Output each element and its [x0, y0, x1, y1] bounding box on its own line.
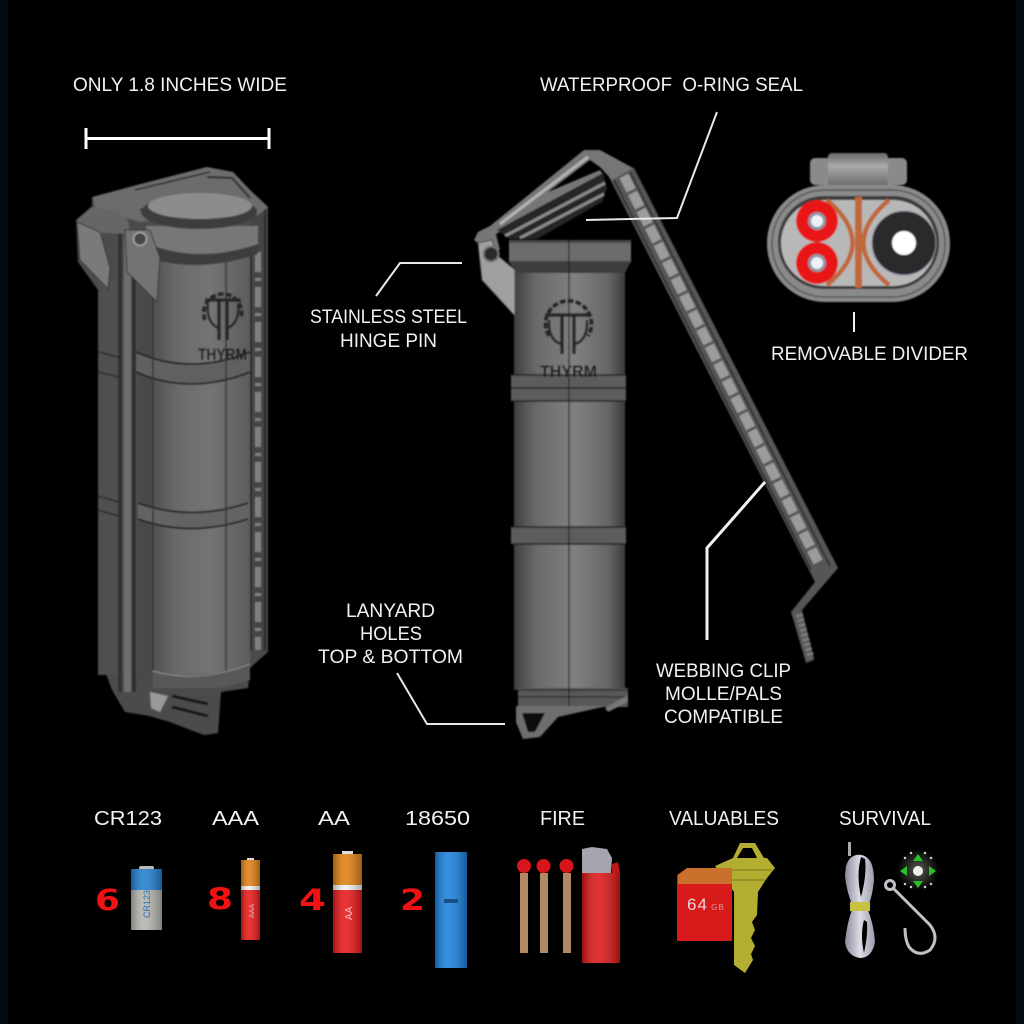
item: AA battery: AA [318, 807, 350, 830]
item: AA battery: 4 [299, 883, 326, 917]
label: stainless steel hinge pin: HINGE PIN [340, 331, 437, 352]
item: 18650 battery: 18650 [405, 807, 470, 830]
hinge plate and pin [478, 240, 515, 316]
item: valuables: VALUABLES [669, 807, 779, 830]
lighter [582, 847, 620, 963]
left closed case illustration [76, 167, 268, 735]
leader: O-ring seal [586, 112, 717, 220]
top collar [509, 240, 631, 273]
label: lanyard holes: TOP & BOTTOM [318, 647, 463, 668]
item: CR123 battery: CR123 [94, 807, 162, 830]
label: lanyard holes [318, 601, 505, 724]
item: fire: FIRE [540, 807, 585, 830]
label: webbing clip: COMPATIBLE [664, 707, 783, 728]
item: CR123 battery [94, 807, 162, 930]
label: lanyard holes: HOLES [360, 624, 422, 645]
item: CR123 battery: 6 [95, 883, 120, 917]
body rings [511, 240, 628, 707]
logo gear and T [204, 294, 242, 340]
hinge knuckle [77, 207, 130, 234]
label: removable divider: REMOVABLE DIVIDER [771, 344, 968, 365]
lid gasket and ribs [497, 157, 607, 239]
item: fire [517, 807, 620, 963]
wire bundle [845, 842, 875, 958]
label: stainless steel hinge pin: STAINLESS STEEL [310, 307, 467, 328]
hinge side plates [77, 222, 160, 302]
heading: only 1.8 inches wide: ONLY 1.8 INCHES WIDE [73, 75, 287, 96]
case silhouette [76, 167, 268, 735]
leader: removable divider [853, 312, 855, 332]
fish hook [886, 880, 935, 953]
item: survival: SURVIVAL [839, 807, 931, 830]
bottom clip foot [148, 688, 221, 735]
label: lanyard holes: LANYARD [346, 601, 435, 622]
label: webbing clip: MOLLE/PALS [665, 684, 782, 705]
item: valuables [669, 807, 779, 973]
item: CR123 battery: CR123 [142, 890, 152, 918]
hinge knuckle [810, 153, 907, 186]
right rail with cutouts [250, 205, 268, 652]
body seams and rings [136, 250, 250, 691]
matches [517, 859, 574, 953]
heading: waterproof O-ring seal: WATERPROOF O-RING SEAL [540, 75, 803, 96]
left side panel [98, 232, 153, 692]
SD card [677, 868, 732, 941]
item: AAA battery: AAA [212, 807, 259, 830]
right open case illustration [474, 150, 838, 739]
item: AA battery [299, 807, 362, 953]
hinge bar [93, 167, 268, 222]
item: 18650 battery: 2 [400, 883, 425, 917]
item: survival [839, 807, 939, 958]
item: AA battery: AA [344, 906, 355, 920]
top band and lid [141, 193, 258, 265]
item: AAA battery: 8 [207, 882, 233, 916]
compass [897, 849, 939, 891]
large cell, top view [872, 211, 936, 275]
brand wordmark: THYRM [540, 362, 597, 381]
main body [153, 250, 250, 675]
small cells, top view [796, 200, 838, 284]
item: 18650 battery [400, 807, 470, 968]
webbing clip arm [609, 164, 838, 663]
item: AAA battery [207, 807, 260, 940]
width dimension line [86, 128, 269, 149]
logo gear and T [545, 301, 591, 354]
copper divider [827, 197, 889, 288]
key [715, 843, 775, 973]
top-down view: removable divider [767, 153, 950, 302]
label: stainless steel hinge pin [310, 263, 467, 352]
SD card: 64 GB [687, 895, 725, 914]
bottom lanyard loop [516, 695, 628, 739]
label: webbing clip [656, 482, 791, 728]
item: AAA battery: AAA [249, 904, 256, 918]
case body [514, 270, 625, 690]
label: webbing clip: WEBBING CLIP [656, 661, 791, 682]
brand wordmark: THYRM [198, 345, 247, 364]
lid top frame [474, 150, 633, 250]
outer shell [767, 185, 950, 302]
